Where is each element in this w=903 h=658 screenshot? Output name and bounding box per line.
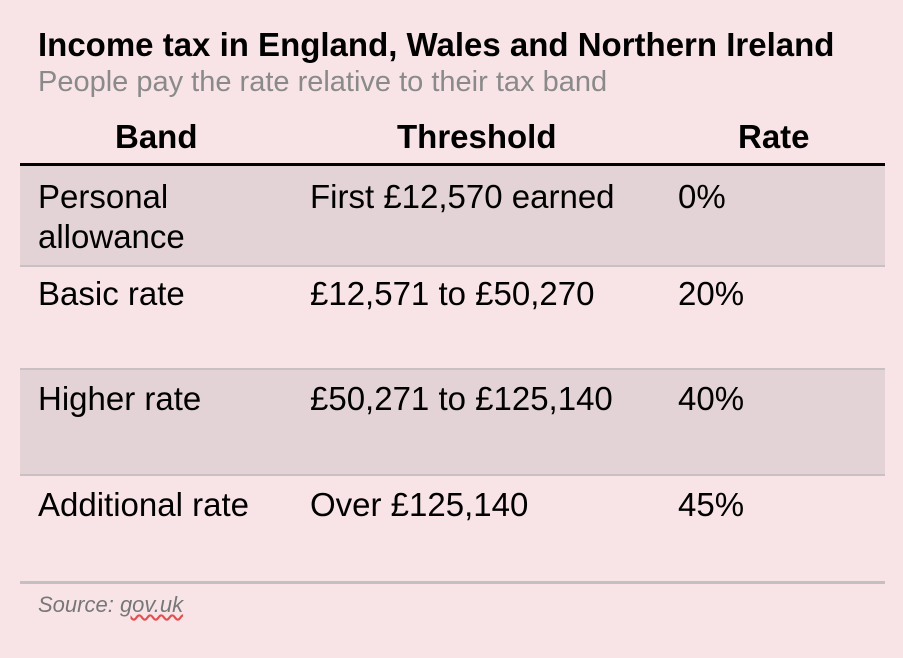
- row: personal allowance: allowance: [38, 218, 185, 255]
- table: [20, 118, 885, 584]
- source: Source: gov.uk: [38, 592, 183, 617]
- header: Band: Band: [115, 118, 198, 155]
- header: Threshold: Threshold: [397, 118, 557, 155]
- row: additional rate: [20, 476, 885, 584]
- row: basic rate: 20%: [678, 275, 744, 312]
- row: personal allowance: [20, 163, 885, 267]
- row: basic rate: [20, 265, 885, 370]
- row: basic rate: £12,571 to £50,270: [310, 275, 594, 312]
- row: basic rate: Basic rate: [38, 275, 185, 312]
- subtitle: People pay the rate relative to their tax band: [38, 66, 607, 98]
- row: higher rate: [20, 370, 885, 476]
- row: personal allowance: First £12,570 earned: [310, 178, 615, 215]
- row: additional rate: Over £125,140: [310, 486, 528, 523]
- header: Rate: Rate: [738, 118, 810, 155]
- row: additional rate: Additional rate: [38, 486, 249, 523]
- row: higher rate: 40%: [678, 380, 744, 417]
- row: personal allowance: Personal: [38, 178, 168, 215]
- row: higher rate: Higher rate: [38, 380, 201, 417]
- row: additional rate: 45%: [678, 486, 744, 523]
- title: Income tax in England, Wales and Northern Ireland: [38, 26, 834, 63]
- row: higher rate: £50,271 to £125,140: [310, 380, 613, 417]
- row: personal allowance: 0%: [678, 178, 726, 215]
